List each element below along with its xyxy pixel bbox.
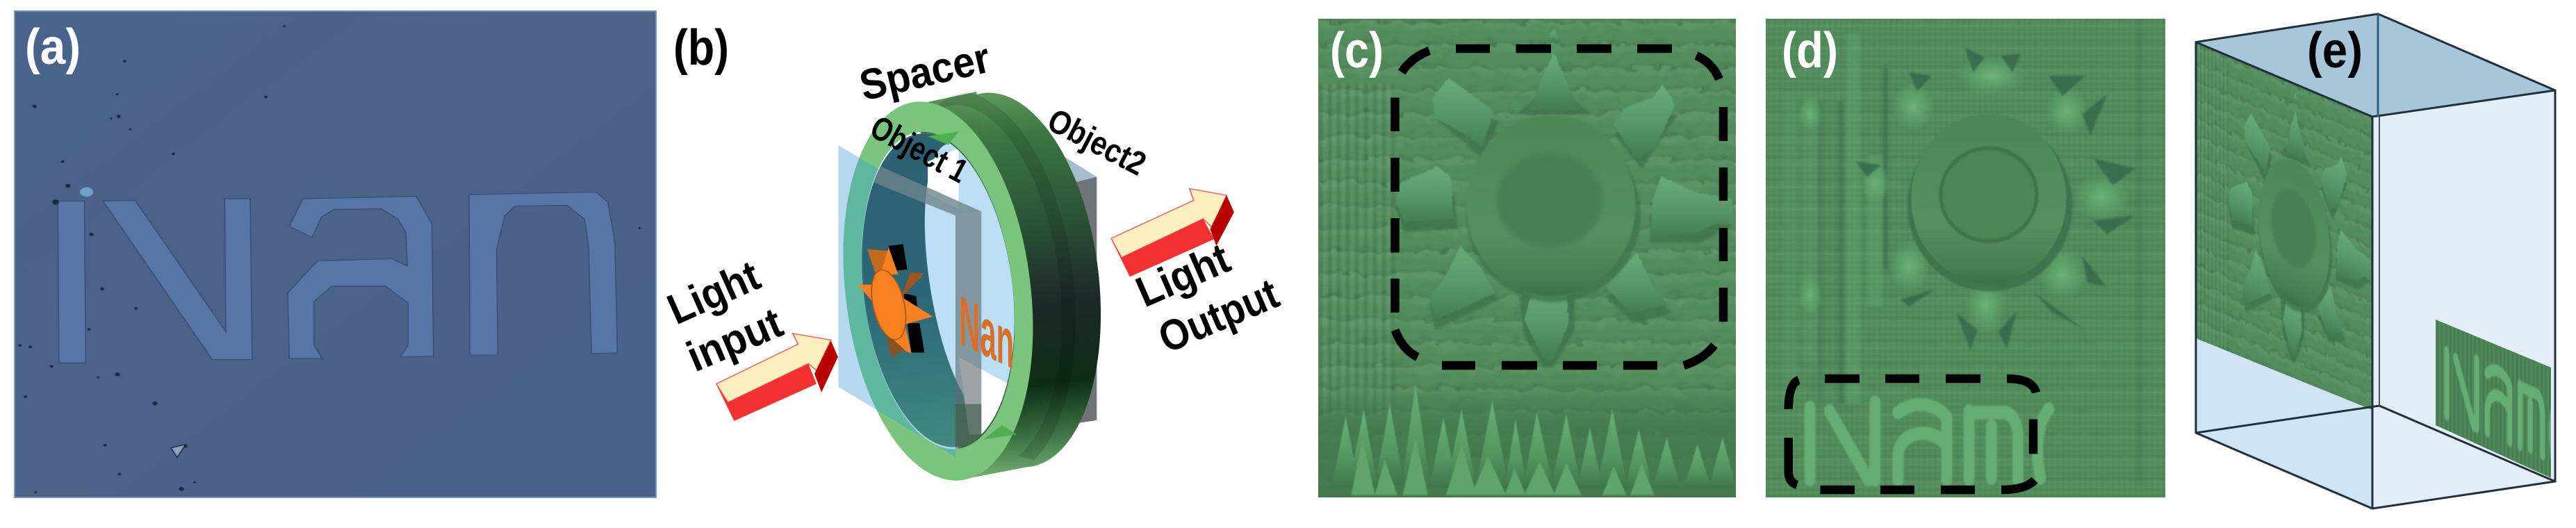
specks: surface debris [18, 25, 641, 493]
object 1 plate [838, 145, 955, 457]
label b: (b) [673, 20, 729, 76]
ring highlights [928, 131, 1017, 440]
label: Light input: input [680, 299, 789, 381]
dashed box: Nan region [1789, 379, 2036, 490]
panel a: microscope image [15, 11, 656, 497]
arrow: light output [1111, 188, 1234, 277]
arrow: light input [716, 333, 838, 421]
box edges [2196, 14, 2555, 509]
object 2 plate [1035, 150, 1097, 424]
dashed box: sun region [1395, 49, 1723, 365]
label: Light Output [1129, 234, 1286, 363]
vertical stripes [1783, 20, 2142, 485]
projected image: Nan [2436, 320, 2551, 478]
label: Object 1: Object 1 [864, 109, 974, 190]
label: Spacer: Spacer [855, 34, 994, 110]
box left lower face [2196, 338, 2372, 509]
letters: Nan pattern [58, 192, 617, 363]
box top face [2196, 14, 2555, 117]
spacer ring interior [845, 125, 1031, 456]
sun rays and shadows [1798, 47, 2135, 350]
panel b: optical setup [661, 20, 1286, 484]
ring over plate [844, 158, 955, 457]
label e: (e) [2307, 23, 2363, 79]
plate side below ring [955, 404, 981, 457]
label: Light input [661, 251, 789, 381]
spacer ring outer wall [920, 92, 1101, 478]
panel d: reconstructed sun and Nan [1758, 10, 2175, 504]
projected image: sun [2197, 43, 2371, 410]
panel e: 3D projection box [2191, 14, 2561, 509]
box right face [2372, 90, 2555, 509]
ring opening [873, 143, 1015, 447]
label: Light Output: Output [1152, 270, 1286, 363]
object 2: Nan text: Nan [959, 280, 1014, 385]
label: Light Output: Light [1129, 234, 1237, 317]
label: Object2: Object2 [1042, 102, 1151, 183]
label: Light input: Light [661, 251, 767, 334]
label a: (a) [25, 19, 81, 75]
object 1: orange sun [858, 244, 933, 357]
label c: (c) [1330, 23, 1384, 79]
spacer ring front face [844, 101, 1033, 481]
bottom peaks: Nan trace [1318, 385, 1736, 497]
label d: (d) [1782, 23, 1838, 79]
panel c: reconstructed sun [1318, 19, 1736, 497]
